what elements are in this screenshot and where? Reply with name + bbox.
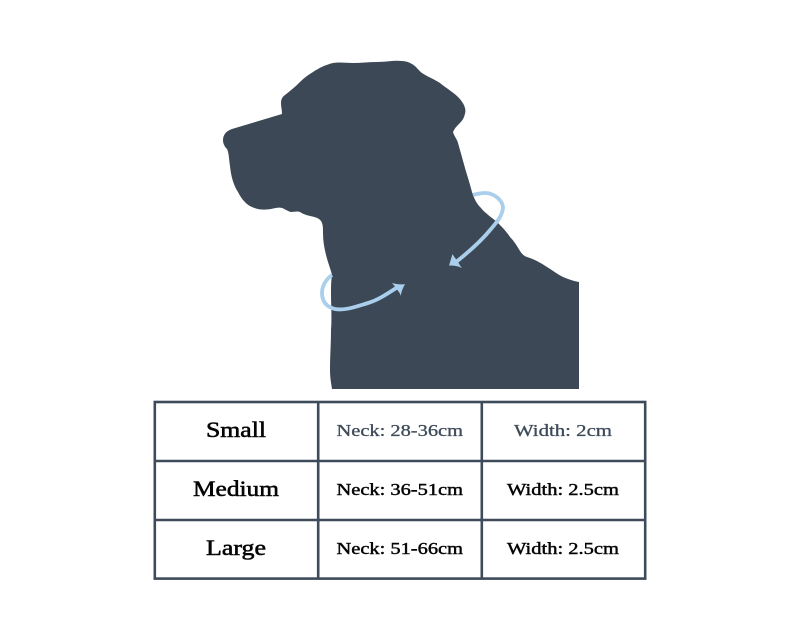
row: medium: Medium [193,476,279,501]
row: small: Width: 2cm [514,421,612,440]
row: small: Neck: 28-36cm [336,421,463,440]
row: large: Width: 2.5cm [507,539,619,558]
dog silhouette [223,61,579,389]
row: small [206,417,612,442]
row: large: Large [206,535,266,560]
arrow: neck measure right [449,193,503,268]
row: small: Small [206,417,266,442]
row: large: Neck: 51-66cm [336,539,463,558]
table grid [155,402,645,579]
row: medium [193,476,619,501]
arrow: neck measure left [322,275,405,309]
row: medium: Neck: 36-51cm [336,480,463,499]
row: medium: Width: 2.5cm [507,480,619,499]
row: large [206,535,619,560]
size table [155,402,645,579]
